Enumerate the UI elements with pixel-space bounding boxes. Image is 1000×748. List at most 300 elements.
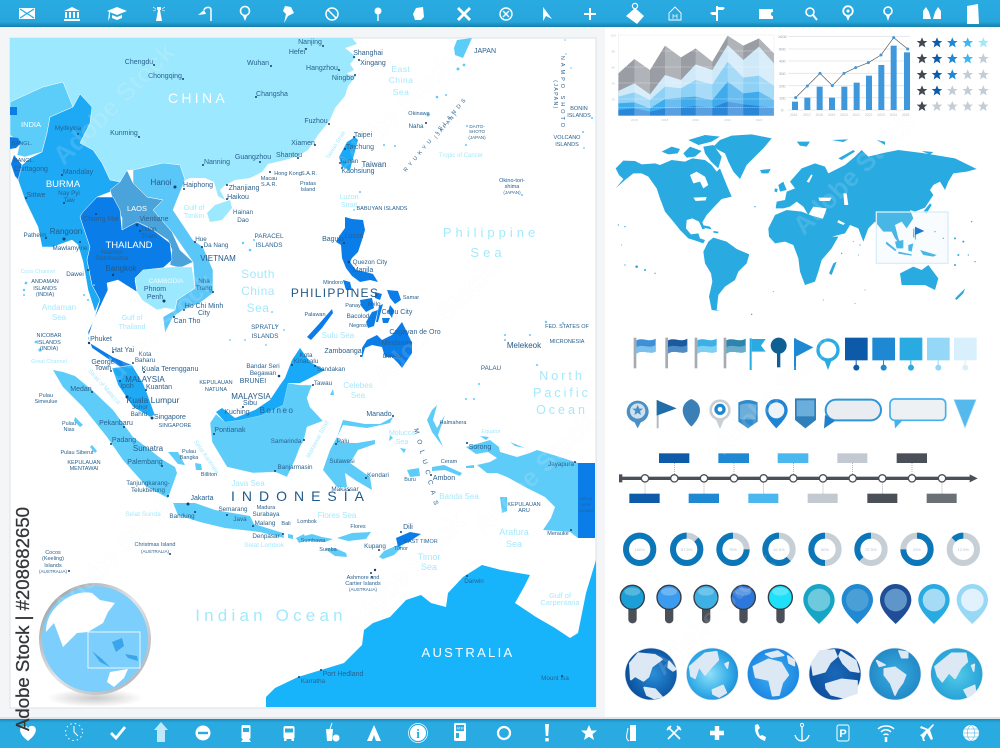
map labels: cities and islands: NEW: [581, 502, 591, 507]
faint stock watermark: Adobe Stock: [47, 36, 181, 170]
map labels: cities and islands: PAPUA: [579, 496, 593, 501]
icon: shower: [198, 7, 211, 21]
icon: pennant flag: [750, 338, 766, 370]
donut 87.5%: 87.5%: [681, 547, 693, 552]
map labels: cities and islands: Thani: [141, 233, 157, 240]
map labels: cities and islands: Pratas: [300, 181, 316, 187]
right column drawings, coordinates at 3x from (605,25): [611, 33, 989, 315]
icon: square speech bubble: [890, 399, 946, 428]
bottom icon bar: [0, 719, 1000, 748]
map labels: cities and islands: KEPULAUAN: [67, 460, 101, 466]
map labels: cities and islands: Kuantan: [146, 384, 172, 391]
icon: hand: [413, 7, 424, 20]
bar and line chart: 400: [779, 59, 786, 64]
map labels: cities and islands: Palembang: [127, 459, 163, 466]
globes: [625, 648, 983, 700]
map labels: seas and oceans: Celebes: [343, 381, 373, 390]
map labels: cities and islands: Ipoh: [120, 383, 134, 390]
bar and line chart: 2021: [853, 113, 860, 117]
world map: Arctic islands: [662, 135, 933, 168]
map labels: cities and islands: (JAPAN): [552, 80, 558, 110]
map land: Cambodia: [135, 267, 195, 310]
map labels: cities and islands: RYUKYU ISLANDS: [403, 95, 470, 173]
map land: Thailand: [80, 197, 172, 367]
map labels: cities and islands: Mindoro: [323, 280, 343, 286]
top icon bar: [0, 0, 1000, 27]
map labels: cities and islands: Baguio: [322, 236, 344, 243]
inset globe continents: [46, 592, 128, 687]
map labels: cities and islands: Zamboanga: [324, 348, 362, 355]
map labels: cities and islands: BONIN: [570, 106, 588, 112]
map labels: cities and islands: (AUSTRALIA): [141, 549, 169, 554]
icon: signpost: [710, 6, 725, 21]
area chart: 80: [612, 49, 615, 53]
map labels: cities and islands: Sulawesi: [329, 458, 355, 465]
faint stock watermark: Adobe Stock: [787, 106, 921, 240]
map labels: cities and islands: Bandung: [169, 513, 195, 520]
map labels: cities and islands: Palawan: [304, 312, 326, 318]
icon: info: [408, 724, 428, 742]
map labels: cities and islands: Ceram: [441, 459, 458, 465]
donut charts: [626, 530, 983, 569]
map labels: seas and oceans: Selat Karimata: [192, 440, 220, 476]
map labels: cities and islands: Sandakan: [317, 366, 346, 373]
map labels: cities and islands: Mindanao: [382, 340, 412, 347]
map land: India: [10, 82, 73, 157]
map labels: cities and islands: Town: [95, 365, 111, 372]
icon: ticket: [759, 9, 773, 19]
map labels: cities and islands: Luzon: [344, 233, 364, 240]
map labels: cities and islands: Nay Pyi: [58, 190, 80, 197]
map labels: cities and islands: Mawlamyine: [52, 245, 88, 252]
bar and line chart: 2024: [890, 113, 897, 117]
map labels: cities and islands: Malang: [255, 520, 276, 527]
area chart: [611, 33, 774, 122]
map labels: cities and islands: Mount Isa: [541, 675, 569, 682]
map labels: countries: VIETNAM: [200, 254, 236, 263]
icon: star pin: [627, 401, 649, 428]
map labels: cities and islands: ISLANDS: [555, 142, 579, 148]
map labels: cities and islands: Pekanbaru: [99, 420, 133, 427]
icon: lighthouse: [153, 7, 165, 21]
icon: drink and food: [326, 723, 340, 742]
world map: Iceland: [760, 169, 771, 173]
map labels: cities and islands: PARACEL: [255, 233, 284, 240]
map labels: cities and islands: Da Nang: [204, 242, 229, 249]
map labels: countries: Borneo: [260, 406, 294, 415]
icon: clock: [66, 724, 82, 740]
map labels: seas and oceans: Andaman: [42, 303, 76, 312]
map labels: cities and islands: Chittagong: [14, 166, 48, 173]
map labels: cities and islands: MICRONESIA: [550, 339, 585, 345]
bar and line chart: 500: [779, 47, 786, 52]
faint stock watermark: Adobe Stock: [707, 326, 841, 460]
map labels: countries: INDONESIA: [231, 488, 371, 504]
map labels: cities and islands: Bacolod: [347, 313, 370, 320]
faint stock watermark: Adobe Stock: [327, 46, 461, 180]
map labels: cities and islands: DAITO-: [469, 124, 485, 129]
icon: circled X: [500, 8, 512, 20]
map labels: cities and islands: Cartier Islands: [345, 581, 381, 587]
bar and line chart: [778, 34, 910, 117]
map labels: cities and islands: Kota: [300, 352, 313, 359]
area chart: 2016: [631, 118, 638, 122]
map labels: cities and islands: Island: [301, 187, 315, 193]
map labels: cities and islands: Changsha: [256, 91, 288, 98]
map labels: cities and islands: Kuching: [224, 409, 250, 416]
map labels: cities and islands: Kota: [139, 351, 152, 358]
map labels: cities and islands: Zhanjiang: [229, 185, 259, 192]
icon: no sign: [326, 8, 338, 20]
icon: rounded speech bubble: [824, 400, 881, 428]
icon: wifi: [878, 726, 894, 742]
icon: heart: [20, 726, 36, 741]
bar and line chart: 2019: [828, 113, 836, 117]
map labels: cities and islands: Cebu City: [382, 309, 413, 316]
map labels: cities and islands: Davao: [383, 353, 402, 360]
map labels: seas and oceans: Selat Sunda: [125, 511, 161, 518]
map labels: cities and islands: Hue: [195, 236, 207, 243]
map land: Indonesian Borneo: [210, 383, 323, 477]
map labels: cities and islands: Kinabalu: [294, 358, 319, 365]
map labels: cities and islands: Flores: [350, 524, 366, 530]
map labels: cities and islands: Samar: [403, 295, 419, 301]
icon: globe: [963, 725, 979, 741]
map labels: cities and islands: Baharu: [135, 357, 156, 364]
map labels: cities and islands: Okinawa: [408, 111, 431, 117]
map labels: seas and oceans: Tropic of Cancer: [439, 153, 483, 159]
map labels: cities and islands: Nakhon: [101, 249, 123, 256]
map labels: cities and islands: Shantou: [276, 152, 302, 159]
globe: South America: [869, 648, 921, 700]
bar and line chart: 2017: [803, 113, 811, 117]
icon: push pin: [283, 6, 294, 23]
map labels: seas and oceans: Makassar Strait: [306, 419, 331, 459]
map labels: seas and oceans: Sulu Sea: [322, 331, 355, 340]
world map: British Isles: [774, 182, 787, 192]
map labels: cities and islands: Vientiane: [139, 216, 169, 223]
map land: Japan: [454, 38, 472, 58]
icon: blue squares with stems: [845, 338, 977, 371]
map labels: cities and islands: Bahru: [131, 411, 148, 418]
map labels: seas and oceans: Indian Ocean: [195, 606, 347, 625]
icon: target pin: [843, 6, 853, 21]
map labels: cities and islands: Christmas Island: [135, 542, 175, 548]
donut 62.5%: [760, 530, 798, 569]
donut 12.5%: [944, 530, 983, 569]
icon: folded map: [626, 3, 644, 24]
world map: Greenland: [713, 134, 772, 179]
map labels: cities and islands: Dawei: [66, 271, 84, 278]
icon: info: i: [416, 726, 420, 741]
map labels: cities and islands: Myitkyina: [55, 125, 82, 132]
area chart: 2018: [662, 118, 669, 122]
icon: location ring: [240, 6, 250, 21]
map land: Sumatra: [53, 370, 177, 498]
map land: Hainan: [207, 200, 232, 222]
map labels: cities and islands: (INDIA): [36, 292, 54, 298]
icon: fuel pump: [627, 725, 636, 741]
world map: Madagascar: [829, 262, 837, 275]
timeline: nodes: [641, 475, 946, 482]
map labels: cities and islands: Kaohsiung: [341, 168, 375, 175]
map land: Java: [173, 503, 284, 538]
map land: Bangladesh: [10, 107, 23, 185]
map labels: cities and islands: Taiwan: [362, 160, 386, 169]
inset globe: position of the region: [39, 583, 151, 707]
map land: Australia: [266, 560, 596, 707]
map labels: seas and oceans: Gulf of: [549, 591, 572, 600]
map labels: seas and oceans: Tonkin: [184, 213, 204, 220]
map labels: cities and islands: ISLANDS: [37, 340, 61, 346]
map labels: cities and islands: Manado: [366, 411, 392, 418]
map labels: cities and islands: Kupang: [364, 543, 386, 550]
map labels: cities and islands: Nanjing: [298, 39, 322, 46]
bar and line chart: 2023: [877, 113, 885, 117]
map labels: seas and oceans: Sea: [421, 562, 437, 572]
area chart: 2022: [724, 118, 731, 122]
map labels: cities and islands: Fuzhou: [304, 118, 328, 125]
map labels: seas and oceans: Gulf of: [122, 315, 142, 322]
map labels: cities and islands: Pulau: [62, 421, 76, 427]
map labels: cities and islands: JAPAN: [474, 48, 496, 55]
map labels: cities and islands: Bali: [281, 521, 291, 527]
world map: Indonesia and Philippines: [886, 228, 937, 257]
map land: Taiwan: [339, 137, 358, 170]
icon: wavy flags: [634, 338, 746, 368]
map labels: seas and oceans: North: [539, 369, 585, 383]
world map: highlighted region box: [876, 212, 948, 263]
map labels: cities and islands: Kunming: [110, 130, 138, 137]
map labels: cities and islands: MENTAWAI: [70, 466, 99, 472]
map labels: cities and islands: Sittwe: [26, 192, 46, 199]
map labels: cities and islands: Wuhan: [247, 60, 269, 67]
icon: blue white pin: [765, 399, 788, 428]
map labels: cities and islands: Naha: [408, 123, 424, 130]
map labels: cities and islands: Ashmore and: [347, 575, 379, 581]
icon: ring pin: [818, 340, 838, 370]
map labels: seas and oceans: South: [241, 267, 275, 281]
donut 37.5%: 37.5%: [865, 547, 877, 552]
vertical stock id text: Adobe Stock | #208682650: [12, 507, 33, 731]
map labels: cities and islands: Udon: [141, 226, 157, 233]
map labels: cities and islands: Okino-tori-: [499, 178, 525, 184]
map land: Philippines: [307, 217, 412, 368]
icon: triangle marker: [954, 400, 976, 428]
map labels: cities and islands: Cagayan de Oro: [389, 329, 441, 336]
icon: crosshair: [584, 8, 596, 20]
faint stock watermark: Adobe Stock: [467, 406, 601, 540]
icon: star: [581, 725, 597, 740]
faint stock watermark: Adobe Stock: [87, 266, 221, 400]
map labels: cities and islands: ANDAMAN: [31, 279, 59, 285]
icon: ATM: [454, 723, 466, 741]
icon: no entry: [196, 726, 210, 740]
icon: triangular flag: [794, 338, 813, 370]
map labels: cities and islands: [12, 39, 594, 685]
bar and line chart: 2018: [816, 113, 823, 117]
map labels: cities and islands: Tainan: [340, 158, 359, 165]
timeline: bottom boxes: [629, 494, 957, 503]
map labels: countries: BURMA: [46, 179, 81, 190]
map land: East Timor: [396, 532, 421, 547]
map labels: seas and oceans: Thailand: [119, 324, 146, 331]
donut 75%: [719, 536, 747, 563]
map labels: seas and oceans: East: [391, 64, 411, 74]
map labels: seas and oceans: Banda Sea: [439, 492, 479, 501]
map labels: seas and oceans: Sea: [396, 439, 408, 446]
donuts, pins and globes, coordinates at 3x from (605,520): [620, 530, 988, 700]
icon: magnifier: [806, 8, 817, 20]
map labels: cities and islands: Hefei: [289, 49, 306, 56]
map cities: dots: [25, 45, 576, 678]
map land: Malaysian Borneo: [216, 348, 325, 422]
map labels: seas and oceans: Gulf of: [184, 205, 204, 212]
map labels: cities and islands: Ho Chi Minh: [185, 303, 223, 310]
map labels: cities and islands: Dili: [403, 524, 413, 531]
icon: navigation arrow: [543, 7, 552, 21]
map labels: cities and islands: Taipei: [354, 132, 373, 139]
inset globe region box: [88, 632, 140, 668]
map labels: countries: THAILAND: [106, 240, 153, 251]
glossy pins: [620, 585, 792, 623]
map labels: cities and islands: PALAU: [481, 365, 502, 372]
icon: square tag pin: [795, 398, 816, 428]
area chart: 60: [612, 65, 615, 69]
map labels: cities and islands: Quezon City: [353, 259, 388, 266]
map labels: cities and islands: Sumba: [319, 547, 338, 553]
map labels: cities and islands: (AUSTRALIA): [39, 569, 67, 574]
map labels: cities and islands: Hong Kong: [274, 171, 302, 177]
icon: tent: [367, 725, 381, 741]
inset globe islands: [92, 638, 138, 667]
world map: inner seas: [690, 172, 848, 225]
map labels: countries: MALAYSIA: [125, 375, 165, 384]
map labels: cities and islands: Shanghai: [353, 50, 383, 57]
map labels: cities and islands: Port Hedland: [323, 671, 364, 678]
map labels: cities and islands: Rangoon: [50, 227, 82, 236]
map labels: seas and oceans: Sea: [52, 313, 67, 322]
map labels: cities and islands: Panay: [345, 303, 361, 309]
map labels: cities and islands: Johor: [132, 404, 148, 411]
map labels: cities and islands: Can Tho: [174, 318, 200, 325]
map labels: cities and islands: ISLANDS: [252, 333, 278, 340]
panel: Southeast Asia map: [10, 38, 596, 708]
donut 87.5%: [667, 530, 706, 569]
map labels: cities and islands: Hat Yai: [112, 347, 135, 354]
map labels: seas and oceans: Sea: [470, 245, 506, 260]
map labels: cities and islands: Pulau Siberut: [60, 450, 94, 456]
world map: location flag: [914, 226, 924, 244]
map labels: cities and islands: Trang: [196, 285, 213, 292]
globe: Asia Pacific: [686, 648, 739, 700]
bar and line chart: 100: [779, 95, 786, 100]
icon: pin: [884, 7, 892, 21]
map labels: cities and islands: Padang: [112, 437, 136, 444]
map labels: cities and islands: Taichung: [346, 144, 374, 151]
icon: tools: [667, 726, 681, 739]
icon: bus: [284, 726, 294, 741]
map labels: seas and oceans: Sea: [506, 539, 522, 549]
map land: Sulawesi: [323, 417, 393, 490]
map labels: cities and islands: GUINEA: [578, 508, 594, 513]
map labels: cities and islands: Java: [233, 516, 247, 523]
map labels: seas and oceans: Strait: [341, 202, 357, 209]
world map: Africa: [768, 210, 838, 285]
map labels: cities and islands: Ratchasima: [95, 255, 129, 262]
icon: parking: [837, 725, 849, 741]
map labels: seas and oceans: China: [389, 75, 413, 85]
map labels: cities and islands: Surabaya: [253, 511, 280, 518]
map labels: cities and islands: S.A.R.: [301, 171, 317, 177]
icon: gray ring pin: [709, 399, 731, 429]
globe: Europe: [809, 648, 861, 700]
icon: two hands: [923, 7, 941, 19]
icon: anchor: [795, 723, 809, 741]
donut 25%: [903, 536, 931, 563]
icon: document: [967, 4, 979, 24]
map labels: cities and islands: Bangka: [180, 455, 199, 461]
map labels: seas and oceans: Philippine: [443, 225, 539, 240]
map labels: cities and islands: Macau: [261, 176, 277, 182]
map labels: countries: LAOS: [127, 204, 147, 213]
world map: Eurasia: [776, 150, 977, 247]
map labels: seas and oceans: Coco Channel: [21, 269, 55, 275]
area chart: 100: [611, 33, 616, 37]
map labels: cities and islands: Tawau: [314, 380, 333, 387]
map labels: cities and islands: Samarinda: [271, 438, 302, 445]
map labels: cities and islands: ISLANDS: [567, 113, 591, 119]
map labels: seas and oceans: Flores Sea: [318, 511, 357, 520]
map labels: cities and islands: (JAPAN): [433, 111, 459, 140]
donut 37.5%: [852, 530, 890, 569]
map labels: seas and oceans: Luzon: [339, 194, 359, 201]
map labels: cities and islands: Darwin: [464, 578, 484, 585]
map labels: cities and islands: Sorong: [469, 444, 491, 451]
map labels: cities and islands: NAMPO SHOTO: [559, 56, 565, 130]
icon: parking: P: [839, 728, 847, 740]
flags, pins and timeline, coordinates at 3x from (605,325): [619, 338, 978, 503]
icon: graduation cap: [107, 7, 127, 21]
map labels: cities and islands: BRUNEI: [240, 378, 266, 385]
bar and line chart: 2022: [865, 113, 873, 117]
map labels: cities and islands: Makassar: [331, 486, 359, 493]
map labels: cities and islands: Kuala Terengganu: [142, 366, 198, 373]
world map: North America: [616, 158, 732, 243]
map labels: cities and islands: Simeulue: [35, 399, 57, 405]
world map: Caribbean islands: [702, 225, 718, 233]
map labels: cities and islands: Karratha: [301, 678, 326, 685]
map labels: countries: [21, 90, 514, 660]
timeline: top boxes: [659, 453, 927, 463]
map labels: cities and islands: Halmahera: [440, 420, 467, 426]
map labels: cities and islands: Bandar Seri: [246, 363, 280, 370]
icon: train: [241, 725, 251, 742]
map labels: cities and islands: Manila: [353, 267, 373, 274]
map labels: cities and islands: FED. STATES OF: [545, 324, 590, 330]
icon: round pin: [374, 8, 382, 21]
map labels: seas and oceans: Equator: [481, 429, 501, 435]
donut 12.5%: 12.5%: [958, 547, 969, 552]
icon: dark round pin: [771, 338, 787, 367]
map labels: cities and islands: S.A.R.: [261, 182, 277, 188]
map labels: seas and oceans: Arafura: [499, 527, 529, 537]
map labels: countries: PHILIPPINES: [291, 286, 379, 300]
map labels: cities and islands: Pulau: [39, 393, 53, 399]
donut 50%: 50%: [821, 547, 829, 552]
donut 100%: [626, 536, 653, 563]
star ratings: [917, 37, 989, 111]
